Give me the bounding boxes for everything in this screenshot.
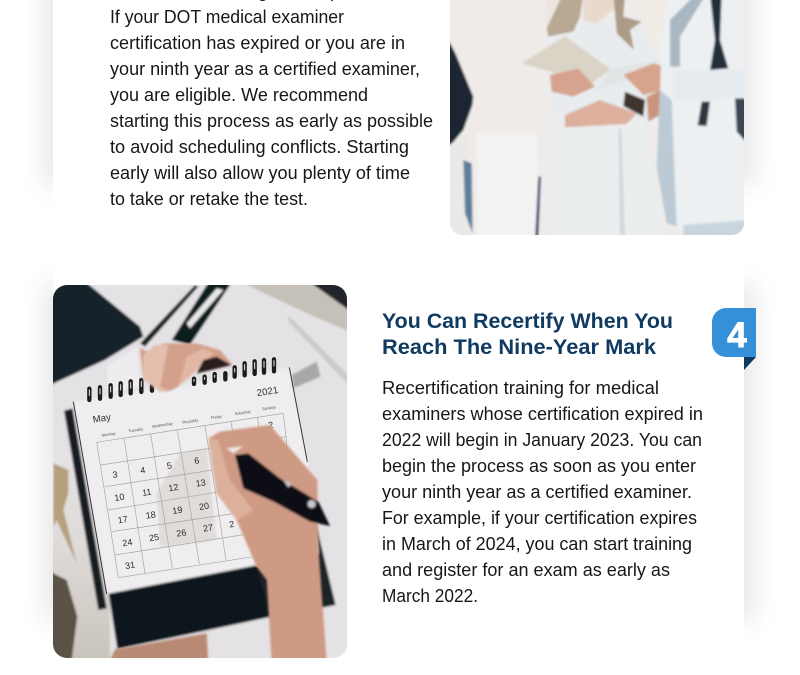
calendar back stand (108, 351, 138, 392)
calendar labels: 13 (195, 477, 206, 489)
heading: recertify at nine years: You Can Recertify When You (382, 310, 673, 333)
upper hand holding the calendar (128, 343, 233, 392)
calendar labels: 2 (267, 420, 274, 430)
writing hand and forearm (208, 425, 327, 663)
text block: recertification timing: 2022 will begin in January 2023. You can (382, 430, 702, 450)
text block: eligibility (110, 0, 433, 209)
calendar base (108, 565, 272, 649)
calendar labels: 2021 (256, 385, 279, 399)
number badge 4 (712, 308, 756, 370)
calendar labels: 11 (141, 487, 152, 498)
calendar labels: 19 (172, 505, 183, 516)
text block: recertification timing: examiners whose certification expired in (382, 404, 703, 424)
calendar labels: May (92, 412, 112, 426)
text block: eligibility: to take or retake the test. (110, 189, 308, 209)
calendar labels: 31 (124, 560, 136, 571)
pen (235, 453, 330, 526)
calendar labels (92, 385, 279, 571)
background pens and clutter (140, 285, 198, 347)
calendar labels: Saturday (234, 409, 251, 416)
calendar labels: 4 (139, 465, 146, 476)
text block: eligibility: your ninth year as a certified examiner, (110, 59, 420, 79)
calendar labels: Friday (210, 413, 222, 420)
calendar labels: 24 (122, 537, 133, 548)
hands (550, 68, 595, 97)
calendar labels: 12 (168, 482, 179, 493)
text block: eligibility: certification has expired or you are in (110, 33, 405, 53)
calendar labels: 26 (176, 527, 187, 539)
open book (522, 36, 611, 86)
calendar labels: 18 (145, 509, 156, 521)
dark notebook (623, 92, 645, 117)
left coat (454, 0, 501, 106)
calendar labels: Thursday (181, 417, 199, 425)
text block: recertification timing: your ninth year as a certified examiner. (382, 482, 692, 502)
backdrop tones (546, 0, 560, 24)
text block: recertification timing: Recertification training for medical (382, 378, 659, 398)
text block: eligibility: early will also allow you plenty of time (110, 163, 410, 183)
photo: medical examiners in white coats (440, 0, 750, 240)
calendar labels: 2 (228, 519, 235, 530)
text block: eligibility: starting this process as early as possible (110, 111, 433, 131)
lower-left table tone and ornaments (53, 510, 112, 658)
photo: hand marking a desk calendar (47, 280, 353, 663)
number badge 4: 4 (727, 316, 747, 355)
hair and face (583, 0, 617, 23)
text block: recertification timing: and register for an exam as early as (382, 560, 670, 580)
text block: eligibility: you are eligible. We recommend (110, 85, 368, 105)
calendar grid (97, 413, 290, 578)
calendar labels: Tuesday (128, 426, 144, 433)
text block: recertification timing (382, 378, 703, 606)
text block: recertification timing: March 2022. (382, 586, 478, 606)
calendar labels: Wednesday (152, 421, 173, 429)
text block: recertification timing: begin the process as soon as you enter (382, 456, 696, 476)
calendar labels: 20 (198, 501, 210, 512)
text block: eligibility: If your DOT medical examiner (110, 7, 344, 27)
heading: recertify at nine years (382, 310, 673, 359)
calendar labels: 3 (112, 469, 118, 480)
calendar labels: 27 (202, 522, 214, 534)
text block: eligibility: to avoid scheduling conflicts. Starting (110, 137, 409, 157)
calendar labels: 6 (193, 455, 200, 466)
text block: recertification timing: For example, if your certification expires (382, 508, 697, 528)
heading: recertify at nine years: Reach The Nine-Year Mark (382, 336, 656, 359)
spiral binding (89, 359, 274, 400)
calendar page (74, 367, 318, 594)
left examiner backpack (450, 40, 475, 146)
dark cloth (53, 285, 144, 386)
calendar labels: 5 (166, 460, 173, 471)
calendar labels: Sunday (262, 404, 276, 411)
text block: recertification timing: in March of 2024, you can start training (382, 534, 692, 554)
calendar labels: Monday (101, 431, 116, 438)
right coat (658, 14, 675, 92)
centre examiner coat (642, 30, 656, 60)
calendar labels: 17 (117, 514, 128, 525)
calendar labels: 25 (148, 532, 160, 543)
calendar labels: 10 (114, 492, 125, 503)
